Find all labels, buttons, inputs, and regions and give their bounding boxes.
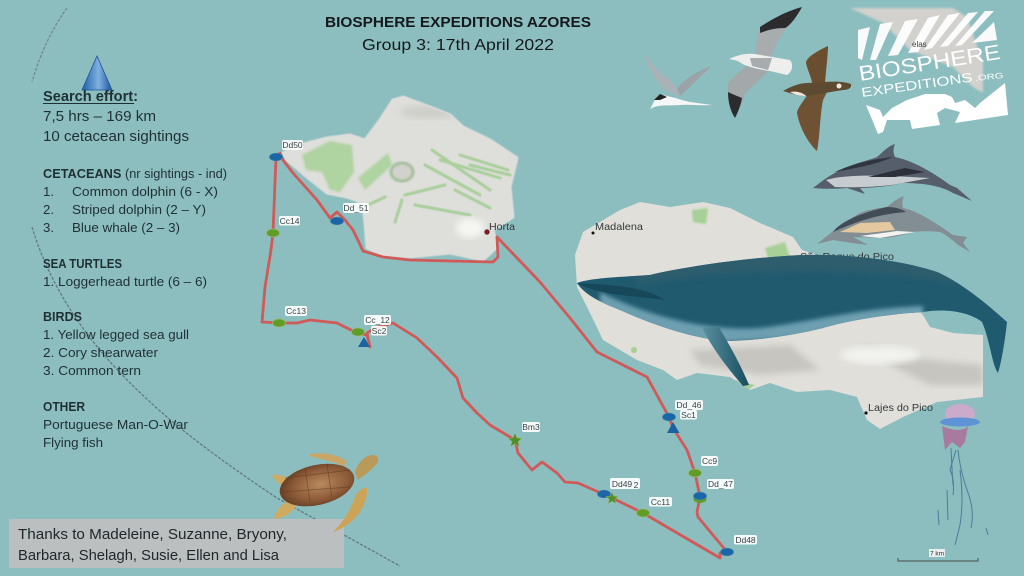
label: Dd49 / Bm_2: Dd49 — [612, 479, 632, 489]
Cory's shearwater illustration — [783, 46, 851, 151]
island fragment behind logo — [850, 8, 983, 93]
survey track — [262, 153, 727, 558]
text block: birds — [43, 309, 189, 378]
label: Sc1: Sc1 — [681, 410, 696, 420]
marker: star Bm3 — [508, 433, 522, 446]
cetacean list: Common dolphin (6 - X) — [72, 184, 218, 199]
search effort values: 7,5 hrs – 169 km — [43, 109, 156, 125]
heading: search effort: Search effort: — [43, 89, 138, 105]
label: Cc14: Cc14 — [280, 216, 300, 226]
text block: search effort — [43, 89, 189, 145]
label: Horta: Horta — [489, 221, 515, 233]
heading: sea turtles: SEA TURTLES — [43, 256, 122, 271]
search effort values — [43, 109, 189, 145]
marker: Dd_51 — [330, 217, 344, 225]
logo stripes — [858, 11, 997, 60]
marker: Cc11 — [636, 509, 650, 517]
subtitle: Group 3: 17th April 2022 — [362, 37, 554, 54]
marker: Dd50 — [270, 153, 282, 161]
heading: cetaceans: CETACEANS (nr sightings - ind) — [43, 166, 227, 181]
scale bar — [898, 549, 978, 561]
island: Faial — [283, 97, 517, 260]
common dolphin illustration — [817, 196, 970, 252]
marker: Cc_12 — [352, 328, 364, 336]
cetacean list: Striped dolphin (2 – Y) — [72, 202, 206, 217]
search effort values: 10 cetacean sightings — [43, 129, 189, 145]
bird list: 2. Cory shearwater — [43, 345, 159, 360]
striped dolphin illustration — [813, 144, 972, 201]
label: Dd49 / Bm_2: 2 — [634, 480, 639, 490]
label: Bm3: Bm3 — [522, 422, 540, 432]
Biosphere Expeditions logo — [857, 11, 1008, 134]
bird list — [43, 327, 189, 378]
other list: Portuguese Man-O-War — [43, 417, 189, 432]
logo fragment label: elas — [912, 40, 927, 49]
cream flank patch — [840, 222, 895, 233]
map place labels — [485, 221, 933, 415]
marker: Cc9 — [688, 469, 702, 477]
cetacean list: 3. — [43, 220, 54, 235]
panel: thanks — [9, 519, 344, 568]
label: Cc9: Cc9 — [702, 456, 717, 466]
heading: birds: BIRDS — [43, 309, 82, 324]
label: Cc13: Cc13 — [286, 306, 306, 316]
cetacean list: 2. — [43, 202, 54, 217]
label: Sc2: Sc2 — [372, 326, 387, 336]
sighting labels — [279, 140, 757, 545]
graticule line: upper arc — [32, 8, 67, 82]
cetacean list: 1. — [43, 184, 54, 199]
Biosphere Expeditions logo: .ORG — [974, 71, 1004, 83]
island: Pico — [575, 202, 983, 429]
other list — [43, 417, 189, 450]
text block: sea turtles — [43, 256, 207, 289]
marker: Dd_46 — [662, 413, 676, 421]
label: Dd50: Dd50 — [282, 140, 303, 150]
cetacean list: Blue whale (2 – 3) — [72, 220, 180, 235]
text block: other — [43, 399, 189, 450]
label: Dd_51: Dd_51 — [343, 203, 369, 213]
label: Madalena: Madalena — [595, 221, 643, 233]
marker: Dd48 — [720, 548, 734, 556]
panel: thanks: Barbara, Shelagh, Susie, Ellen and Lisa — [18, 548, 280, 564]
label: Dd48: Dd48 — [735, 535, 756, 545]
label: Sao Roque do Pico: São Roque do Pico — [800, 251, 894, 263]
panel: thanks: Thanks to Madeleine, Suzanne, Bryony, — [18, 527, 287, 543]
whale flipper — [702, 326, 749, 386]
label: Dd_47: Dd_47 — [708, 479, 733, 489]
icon: blue survey triangle — [82, 56, 112, 90]
graticule line: lower arc — [32, 227, 400, 566]
marker: Dd_47 — [694, 492, 706, 503]
label: Cc11: Cc11 — [651, 497, 670, 507]
sighting markers — [266, 153, 734, 556]
text block: cetaceans — [43, 166, 227, 235]
label: Cc_12: Cc_12 — [365, 315, 390, 325]
Biosphere Expeditions logo: EXPEDITIONS — [860, 69, 974, 100]
cetacean list — [43, 184, 218, 235]
logo wordmark: BIOSPHERE — [857, 41, 1002, 86]
Portuguese man-o-war illustration — [938, 404, 988, 545]
title: BIOSPHERE EXPEDITIONS AZORES — [325, 15, 591, 31]
loggerhead turtle illustration — [272, 453, 378, 532]
marker: Cc13 — [272, 319, 286, 327]
marker: Sc2 — [358, 337, 370, 347]
yellow-legged gull illustration — [728, 7, 802, 118]
marker: star Bm_2 — [606, 492, 618, 504]
marker: Cc14 — [266, 229, 280, 237]
common tern illustration — [645, 53, 712, 110]
turtle list: 1. Loggerhead turtle (6 – 6) — [43, 274, 207, 289]
other list: Flying fish — [43, 435, 103, 450]
scale bar: 7 km — [930, 550, 944, 558]
blue whale illustration — [577, 245, 1007, 386]
label: Dd49 / Bm_2 — [610, 478, 640, 490]
bird list: 1. Yellow legged sea gull — [43, 327, 189, 342]
label: Dd_46: Dd_46 — [676, 400, 702, 410]
marker: Dd49 — [598, 490, 610, 498]
logo world map — [866, 83, 1008, 134]
heading: other: OTHER — [43, 399, 85, 414]
marker: Sc1 — [667, 422, 680, 433]
bird list: 3. Common tern — [43, 363, 141, 378]
label: Lajes do Pico: Lajes do Pico — [868, 402, 933, 414]
